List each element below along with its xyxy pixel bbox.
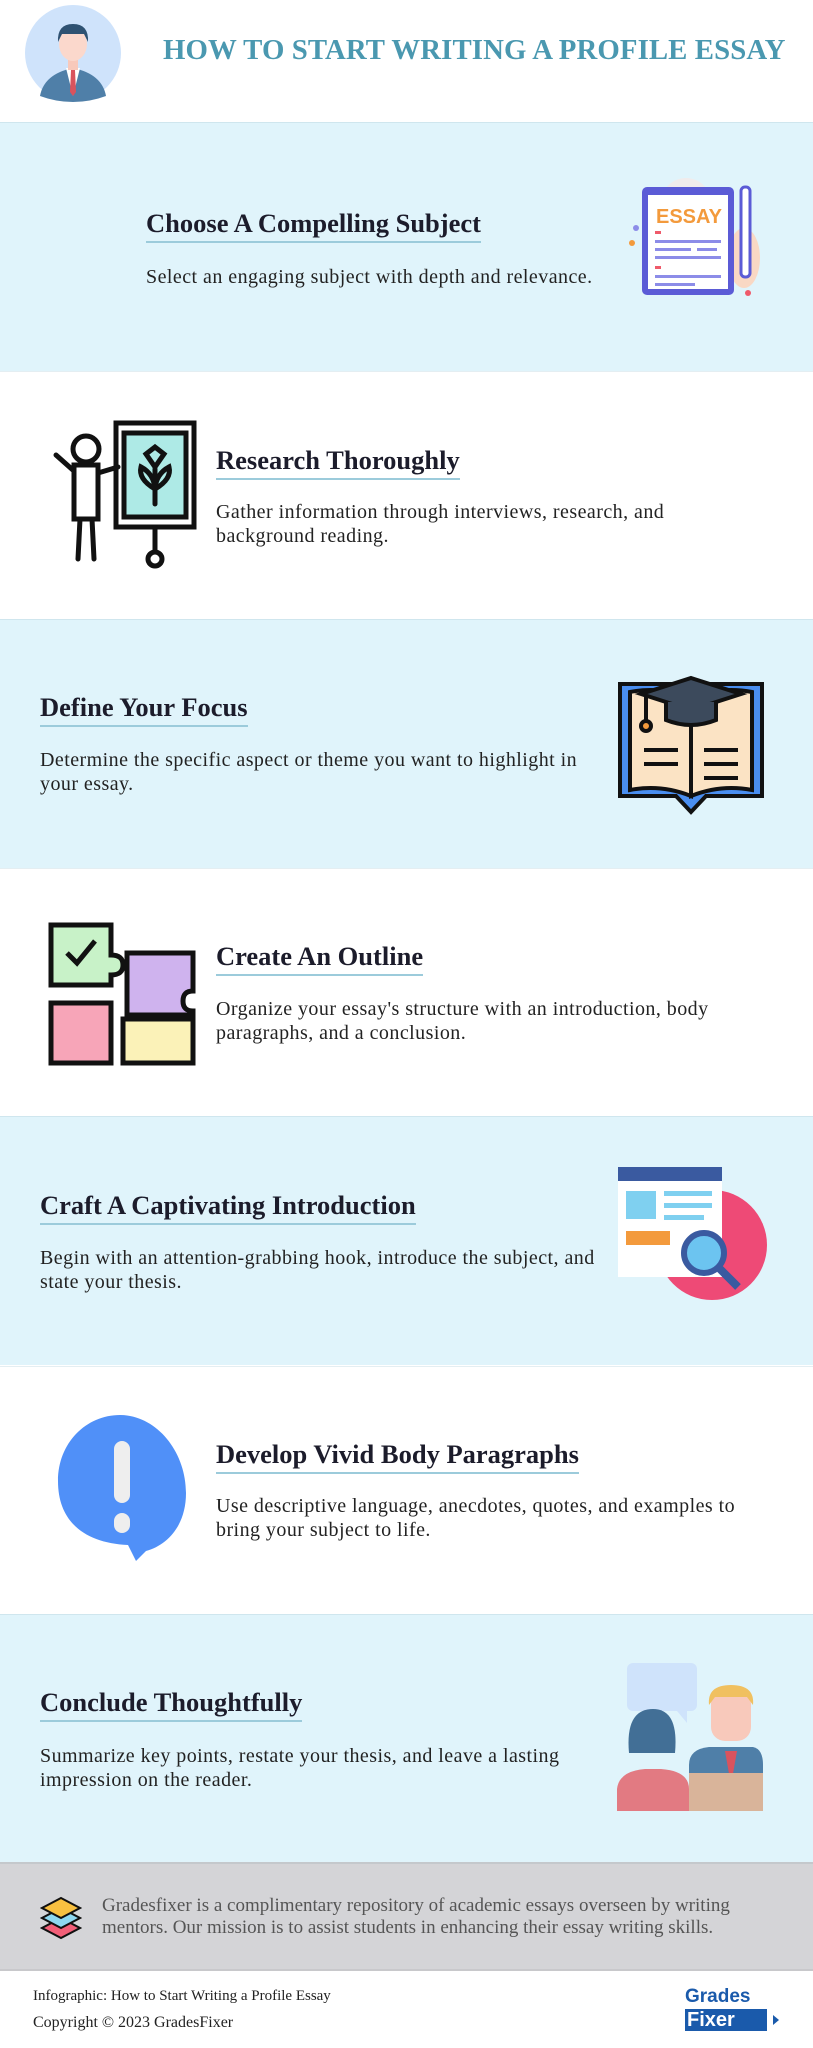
panel: research thoroughly <box>0 371 813 620</box>
heading: Define Your Focus <box>40 692 248 722</box>
icon: layers <box>40 1896 82 1940</box>
text: Gradesfixer is a complimentary repository of academic essays overseen by writing <box>102 1895 730 1916</box>
panel: develop vivid body paragraphs <box>0 1366 813 1615</box>
icon: exclamation bubble <box>58 1415 186 1561</box>
footer: credits: Infographic: How to Start Writing a Profile Essay <box>33 1988 331 2004</box>
heading: Choose A Compelling Subject <box>146 208 481 238</box>
panel: create an outline <box>0 868 813 1117</box>
text: bring your subject to life. <box>216 1519 431 1541</box>
text: state your thesis. <box>40 1271 182 1293</box>
heading: Develop Vivid Body Paragraphs <box>216 1439 579 1469</box>
title: HOW TO START WRITING A PROFILE ESSAY <box>163 34 785 66</box>
text: Select an engaging subject with depth and relevance. <box>146 266 593 288</box>
footer: copyright: Copyright © 2023 GradesFixer <box>33 2014 233 2031</box>
logo <box>685 1986 779 2031</box>
panel: define your focus <box>0 619 813 868</box>
text <box>40 1247 595 1293</box>
panel: conclude thoughtfully <box>0 1614 813 1863</box>
text: Determine the specific aspect or theme you want to highlight in <box>40 749 577 771</box>
text: paragraphs, and a conclusion. <box>216 1022 466 1044</box>
text <box>216 501 664 547</box>
text <box>216 1495 735 1541</box>
logo: Fixer <box>687 2009 735 2031</box>
icon: presenter <box>54 420 196 568</box>
text <box>102 1895 730 1938</box>
panel: craft a captivating introduction <box>0 1116 813 1365</box>
text <box>40 749 577 795</box>
icon: essay tablet: ESSAY <box>656 206 723 228</box>
icon: avatar <box>25 5 121 102</box>
heading: Create An Outline <box>216 941 423 971</box>
footer: about <box>0 1862 813 1971</box>
heading: Craft A Captivating Introduction <box>40 1190 416 1220</box>
text: Gather information through interviews, research, and <box>216 501 664 523</box>
text: your essay. <box>40 773 134 795</box>
text: background reading. <box>216 525 389 547</box>
icon: puzzle <box>48 922 196 1066</box>
panel: choose a compelling subject <box>0 122 813 371</box>
text: Use descriptive language, anecdotes, quotes, and examples to <box>216 1495 735 1517</box>
text: Begin with an attention-grabbing hook, introduce the subject, and <box>40 1247 595 1269</box>
text <box>216 998 709 1044</box>
icon: essay tablet <box>629 178 760 296</box>
text: impression on the reader. <box>40 1769 252 1791</box>
icon: search page <box>618 1167 767 1300</box>
heading: Research Thoroughly <box>216 445 460 475</box>
text: mentors. Our mission is to assist students in enhancing their essay writing skills. <box>102 1917 713 1938</box>
text: Organize your essay's structure with an introduction, body <box>216 998 709 1020</box>
logo: Grades <box>685 1986 750 2007</box>
icon: book with cap <box>618 676 764 815</box>
heading: Conclude Thoughtfully <box>40 1687 302 1717</box>
icon: two people talking <box>617 1663 763 1811</box>
text <box>40 1745 559 1791</box>
header <box>0 0 813 122</box>
text: Summarize key points, restate your thesis, and leave a lasting <box>40 1745 559 1767</box>
